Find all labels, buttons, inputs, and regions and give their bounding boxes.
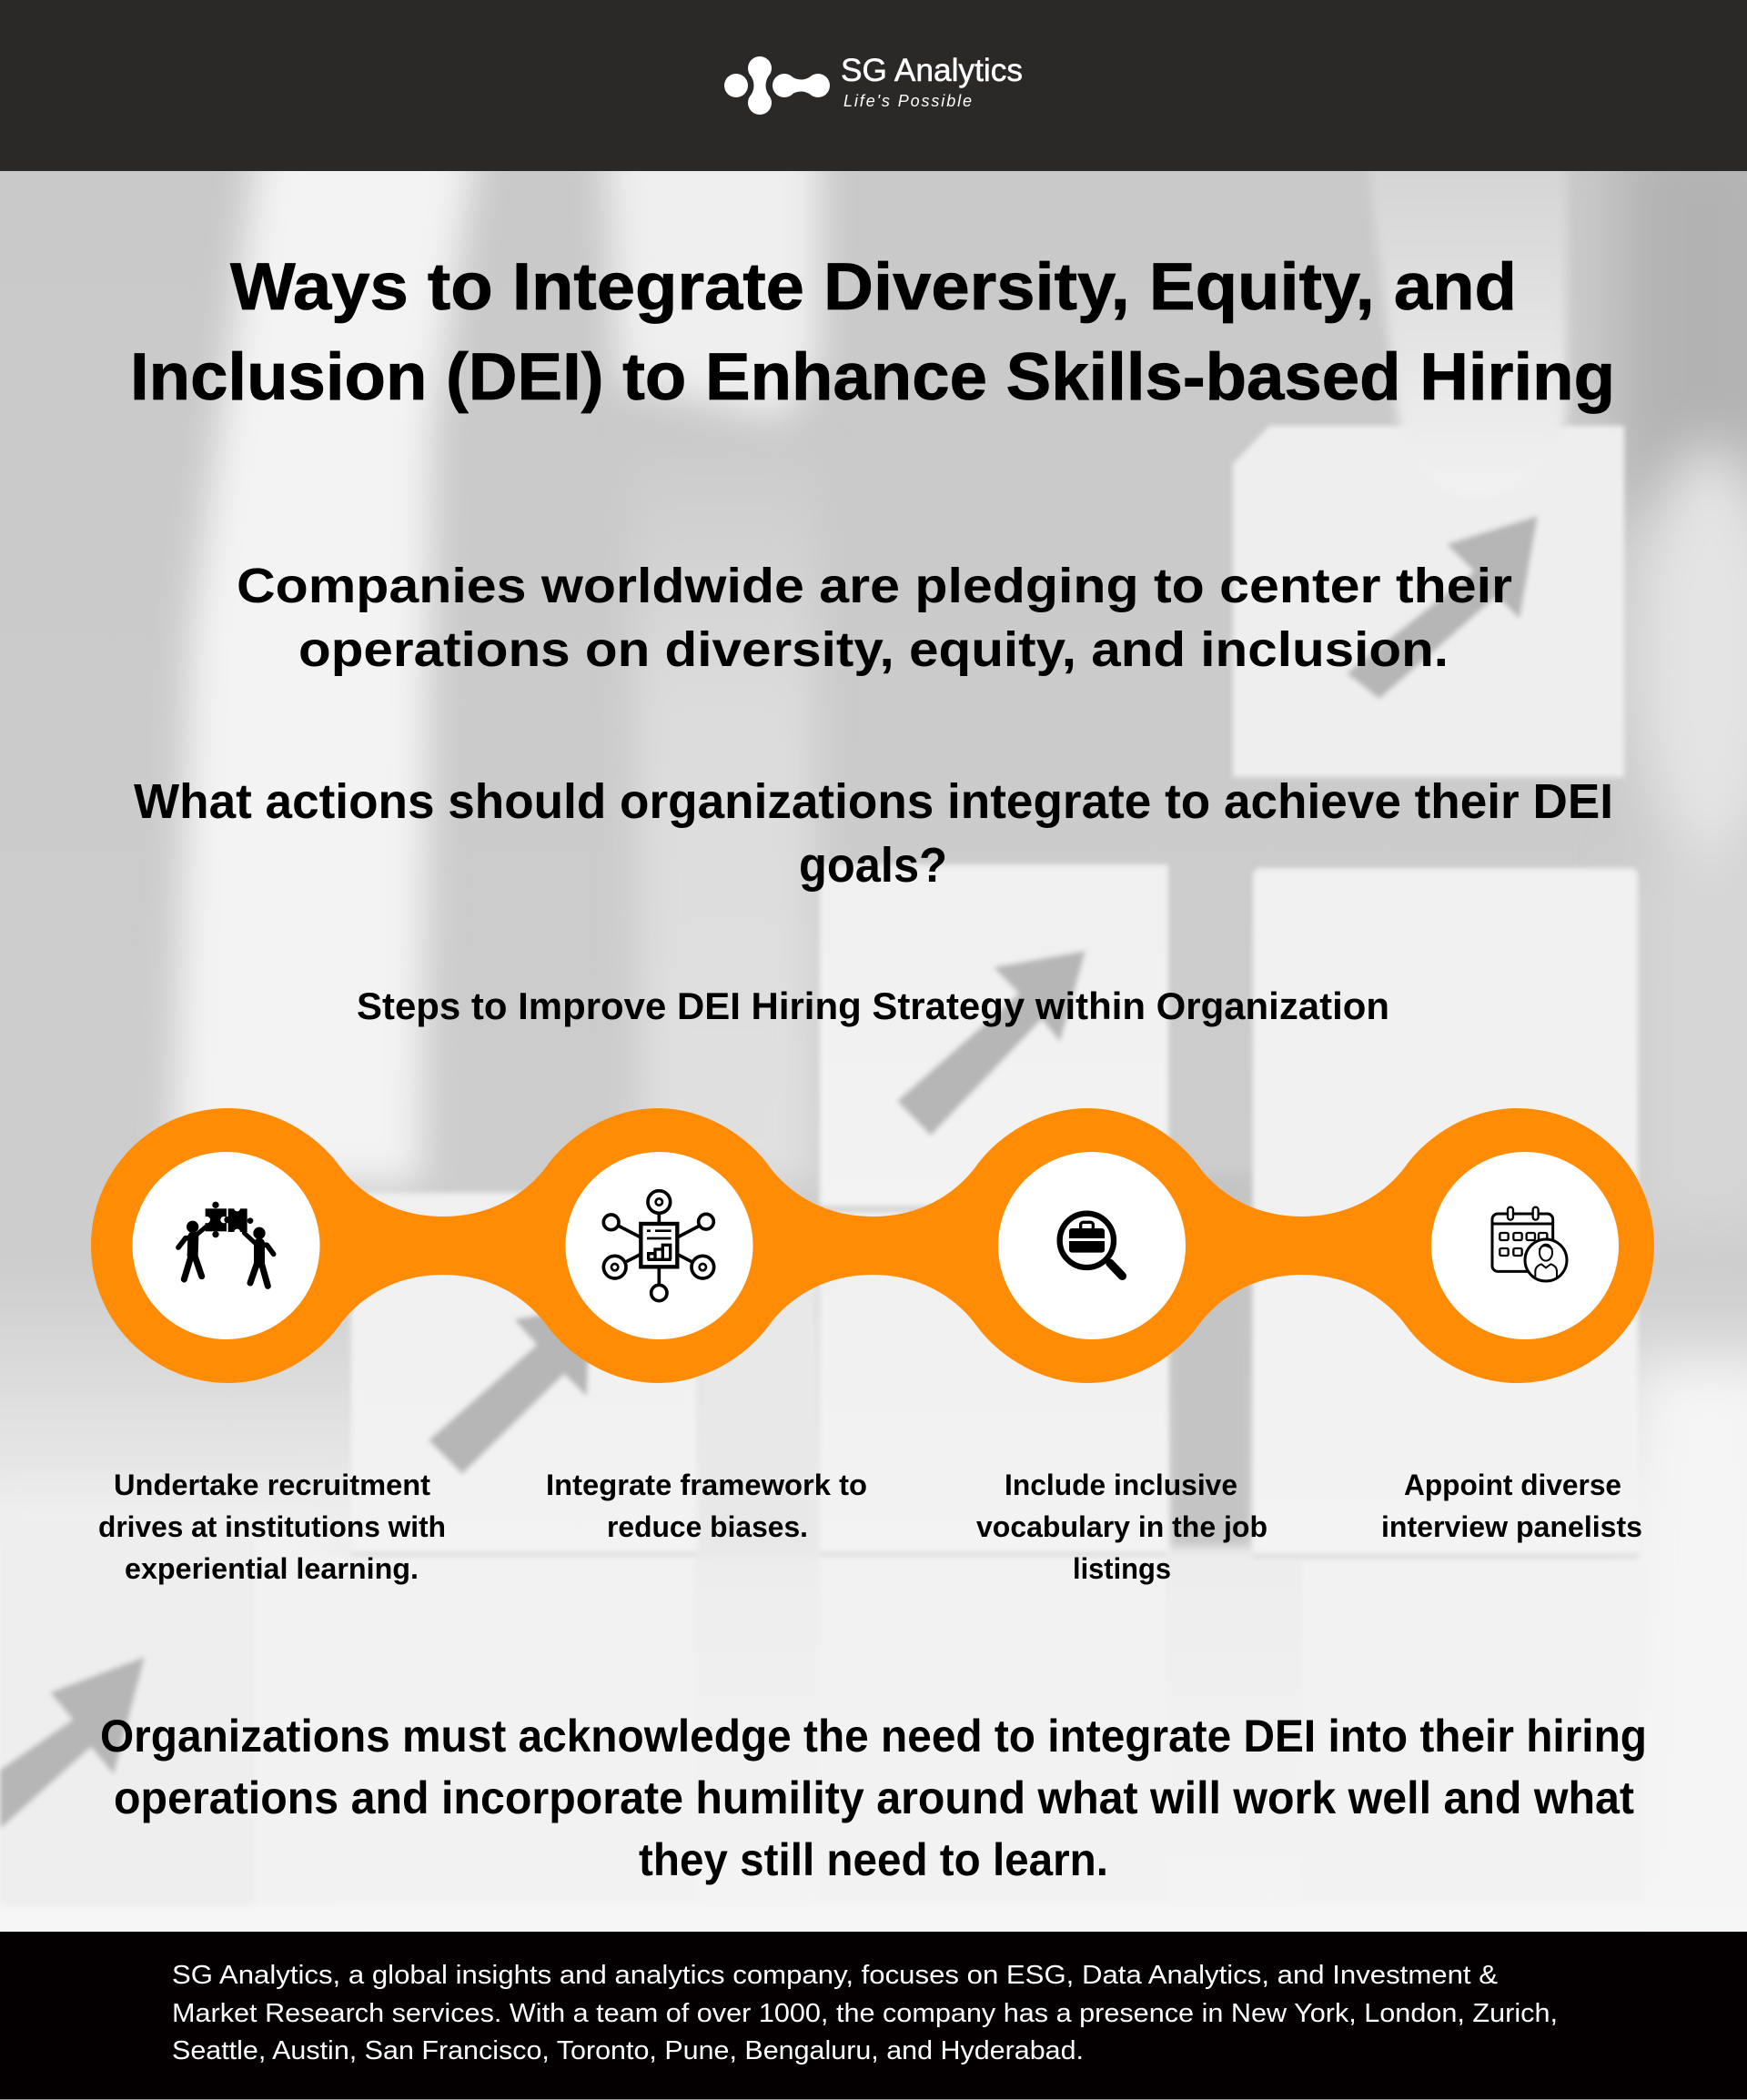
logo wordmark: Life's Possible <box>843 92 972 110</box>
step 1 label: Undertake recruitment <box>114 1469 430 1501</box>
title <box>130 250 1615 414</box>
closing statement <box>100 1711 1647 1885</box>
step 2 circle <box>566 1152 753 1339</box>
step 3 label: Include inclusive <box>1005 1469 1237 1501</box>
intro statement: Companies worldwide are pledging to center their <box>237 559 1512 613</box>
icon: calendar with interviewer <box>1492 1207 1567 1281</box>
logo wordmark <box>841 53 1023 110</box>
step 2 label: Integrate framework to <box>546 1469 867 1501</box>
closing statement: operations and incorporate humility around what will work well and what <box>114 1772 1634 1823</box>
intro statement <box>237 559 1512 677</box>
intro statement: operations on diversity, equity, and inclusion. <box>298 622 1449 677</box>
title: Inclusion (DEI) to Enhance Skills-based Hiring <box>130 340 1615 414</box>
icon: people joining puzzle pieces <box>178 1202 274 1286</box>
footer company description: Seattle, Austin, San Francisco, Toronto, Pune, Bengaluru, and Hyderabad. <box>172 2036 1084 2065</box>
step 4 label: Appoint diverse <box>1404 1469 1621 1501</box>
icon: framework network with report <box>603 1191 714 1301</box>
title: Ways to Integrate Diversity, Equity, and <box>230 250 1517 324</box>
footer bar <box>0 1932 1747 2100</box>
section heading: Steps to Improve DEI Hiring Strategy within Organization <box>357 984 1389 1027</box>
question: goals? <box>799 838 947 893</box>
step 3 label: listings <box>1073 1552 1171 1585</box>
logo wordmark: SG Analytics <box>841 53 1023 88</box>
step 1 label: drives at institutions with <box>98 1510 446 1543</box>
step 4 label: interview panelists <box>1381 1510 1642 1543</box>
icon: magnifier over briefcase <box>1060 1214 1122 1276</box>
footer company description <box>172 1961 1558 2065</box>
step 3 circle <box>998 1152 1186 1339</box>
step 4 label <box>1381 1469 1642 1543</box>
question: What actions should organizations integrate to achieve their DEI <box>134 774 1613 829</box>
header bar <box>0 0 1747 171</box>
question <box>134 774 1613 893</box>
closing statement: Organizations must acknowledge the need to integrate DEI into their hiring <box>100 1711 1647 1762</box>
step 2 label <box>546 1469 867 1543</box>
footer company description: SG Analytics, a global insights and analytics company, focuses on ESG, Data Analytics, and Investment & <box>172 1961 1498 1990</box>
step 3 label: vocabulary in the job <box>976 1510 1267 1543</box>
footer company description: Market Research services. With a team of over 1000, the company has a presence in New York, London, Zurich, <box>172 1999 1558 2028</box>
step 3 label <box>976 1469 1267 1585</box>
logo mark <box>724 56 830 115</box>
step 1 label <box>98 1469 446 1585</box>
closing statement: they still need to learn. <box>639 1834 1108 1885</box>
step 4 circle <box>1431 1152 1619 1339</box>
step 1 label: experiential learning. <box>125 1552 419 1585</box>
step 2 label: reduce biases. <box>607 1510 808 1543</box>
orange step connector <box>91 1108 1654 1383</box>
arrows in photo <box>0 516 1538 1829</box>
step 1 circle <box>133 1152 320 1339</box>
